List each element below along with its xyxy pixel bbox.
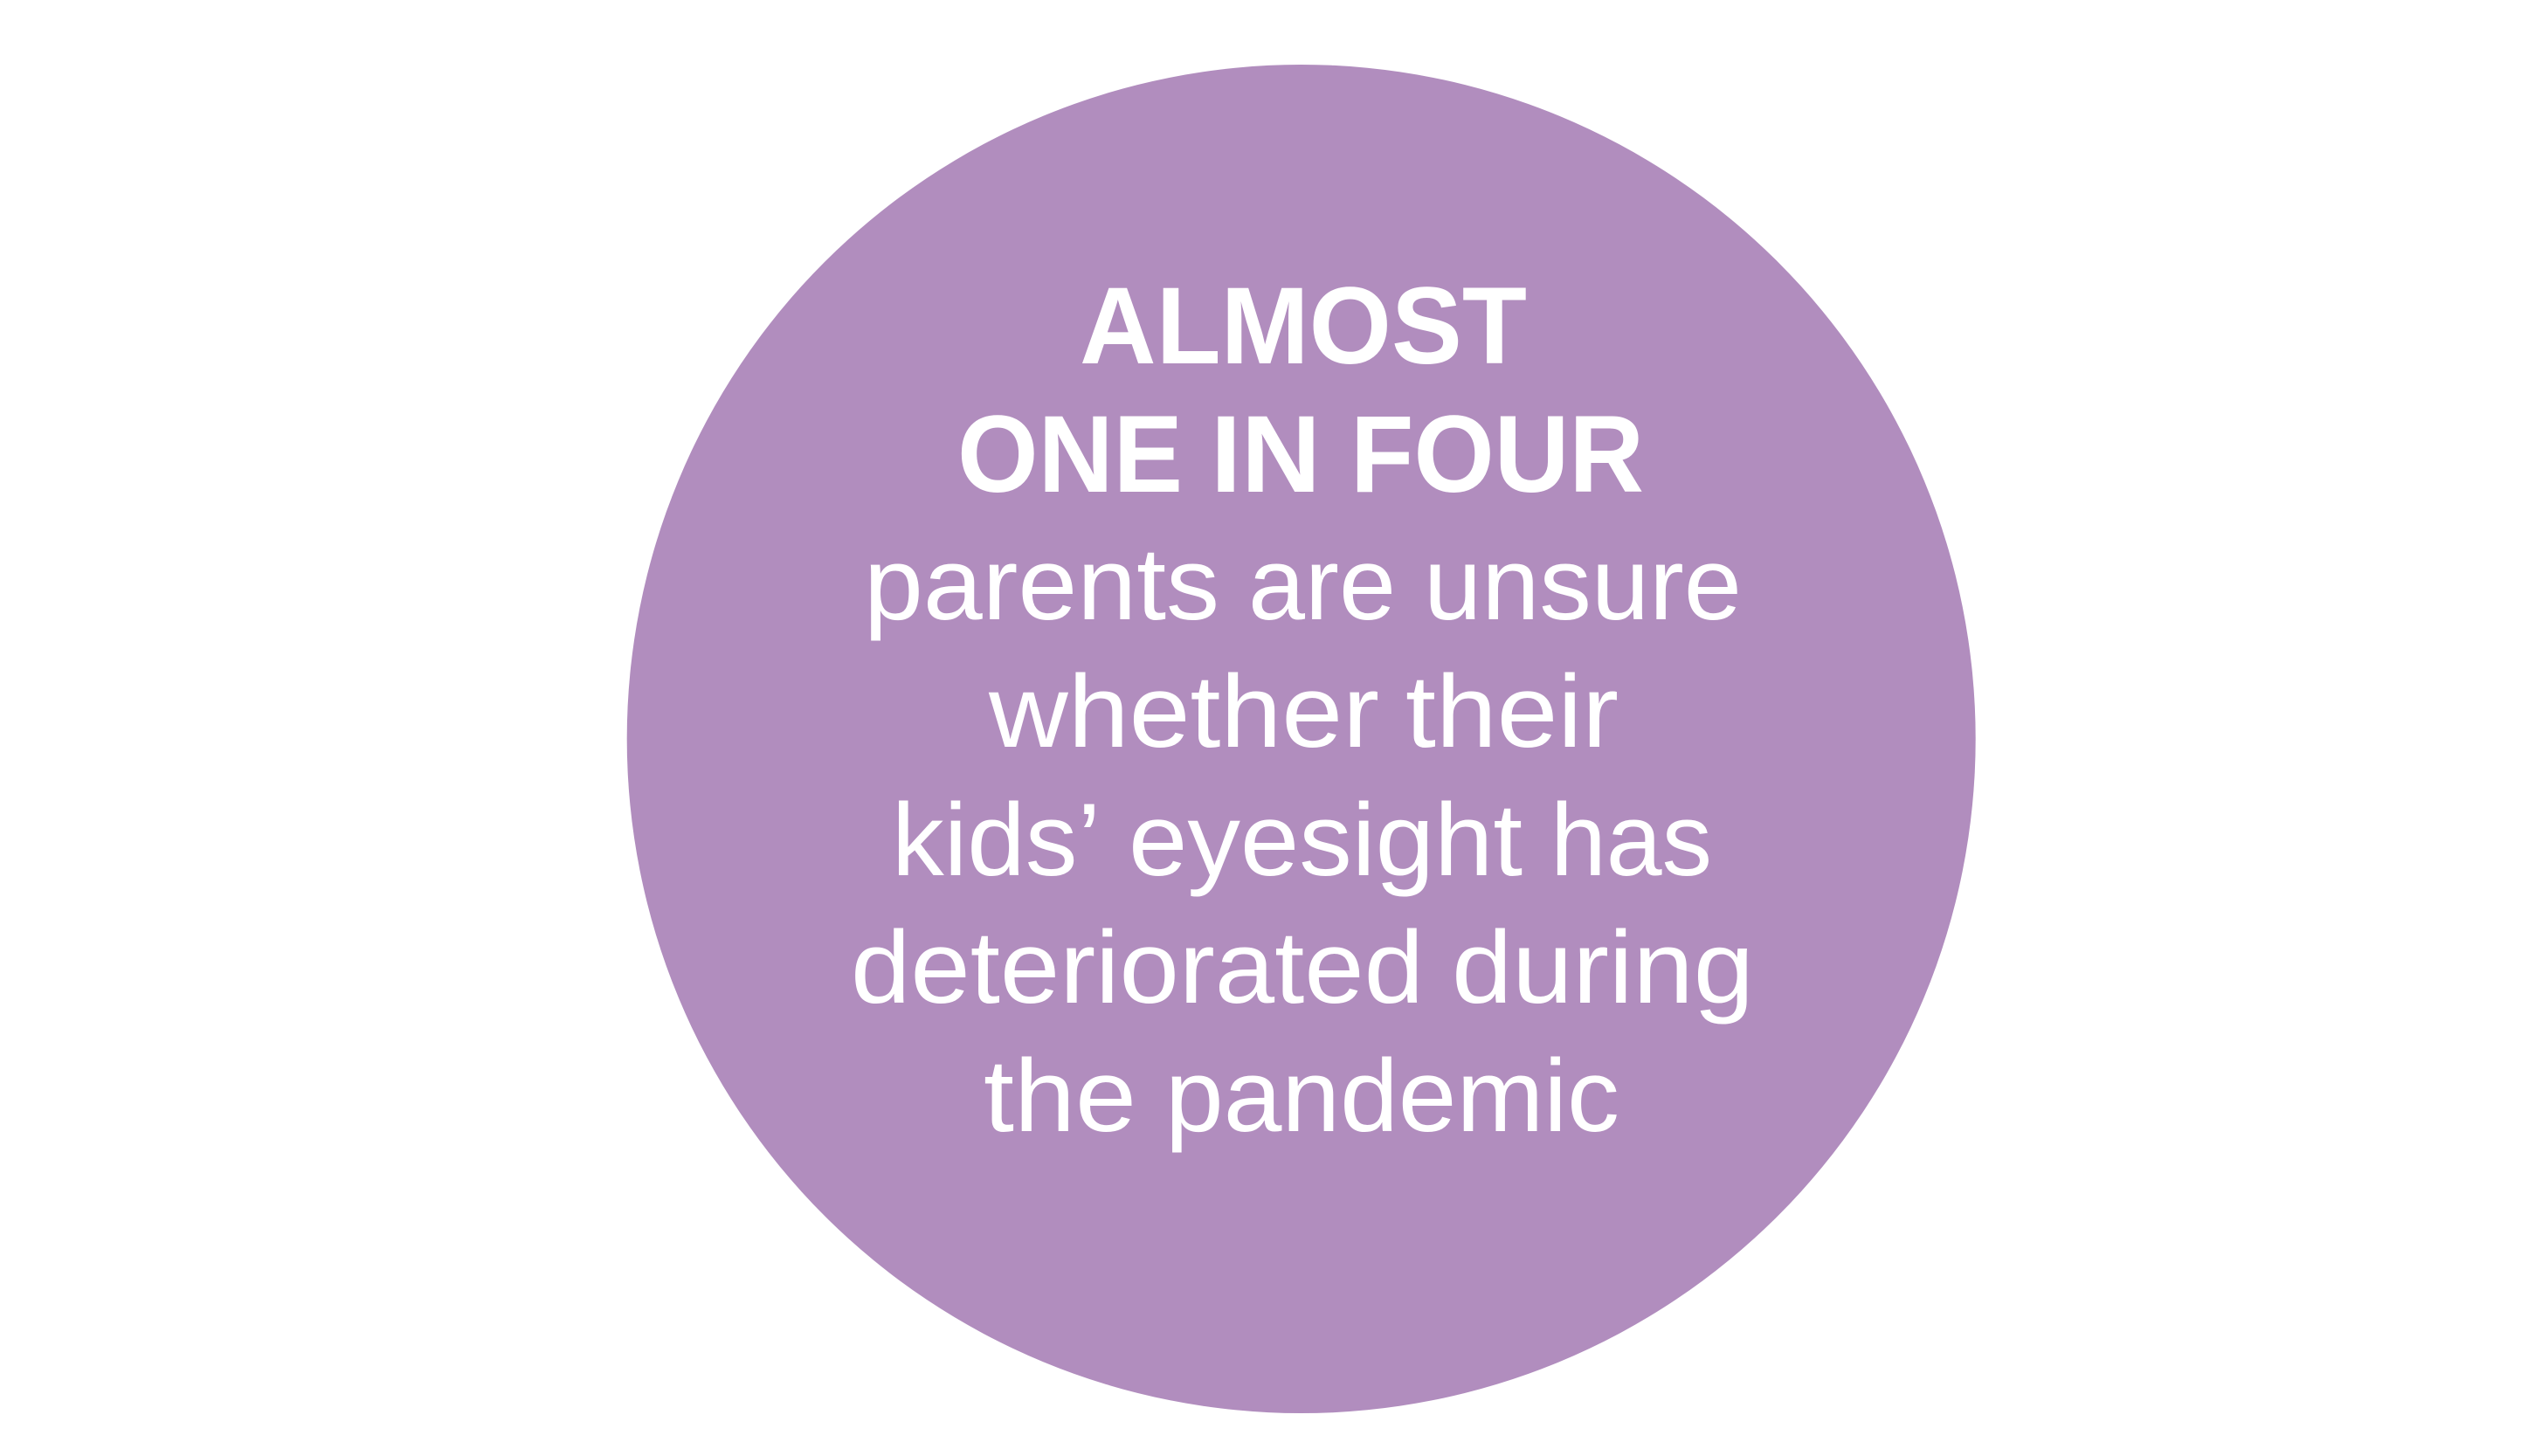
panel: purple circle — [627, 65, 1976, 1413]
headline: one in four: ONE — [957, 394, 1183, 515]
body line 4 — [851, 910, 1754, 1025]
body line 3: kids’ — [892, 783, 1101, 898]
body line 3: eyesight — [1129, 783, 1523, 898]
body line 3: has — [1550, 783, 1712, 898]
statistic text block — [851, 266, 1754, 1154]
body line 2: their — [1405, 654, 1619, 769]
body line 5: pandemic — [1165, 1039, 1619, 1154]
headline: almost: ALMOST — [1080, 266, 1527, 387]
body line 2 — [988, 654, 1619, 769]
body line 1 — [864, 527, 1742, 642]
body line 2: whether — [988, 654, 1379, 769]
body line 1: unsure — [1424, 527, 1742, 642]
body line 1: parents — [864, 527, 1219, 642]
body line 4: during — [1452, 910, 1754, 1025]
headline: one in four: FOUR — [1350, 394, 1644, 515]
body line 3 — [892, 783, 1712, 898]
headline: one in four: IN — [1211, 394, 1321, 515]
body line 4: deteriorated — [851, 910, 1424, 1025]
body line 5: the — [984, 1039, 1136, 1154]
headline: one in four — [957, 394, 1644, 515]
body line 1: are — [1248, 527, 1396, 642]
